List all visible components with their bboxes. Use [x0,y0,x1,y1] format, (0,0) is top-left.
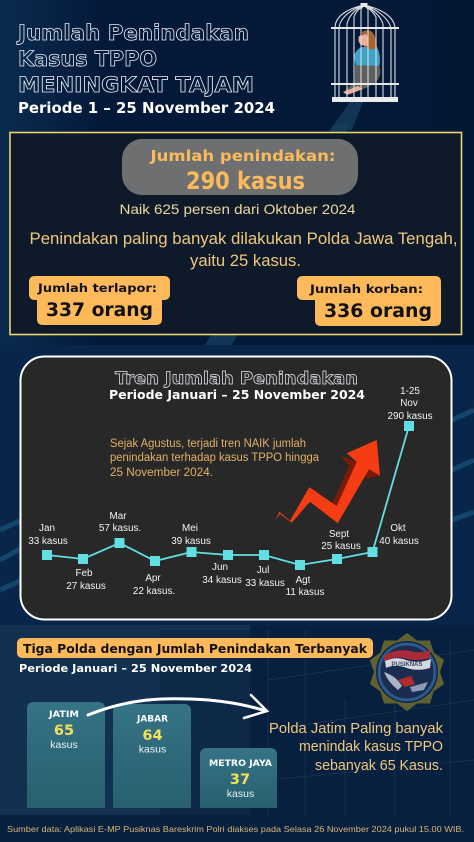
heading: top three regions [17,638,373,658]
trend note: 25 November 2024. [110,467,213,479]
bar: Jatim: JATIM [48,710,79,720]
text: top police region [30,229,458,270]
line chart: Apr [145,573,161,584]
chart subtitle: Periode Januari – 25 November 2024 [109,387,365,402]
line chart: Mar [109,511,127,522]
line chart: Mei [182,523,198,534]
badge: victims: 336 orang [324,301,432,322]
line chart: 33 kasus [245,578,285,589]
bar: Metro Jaya: 37 [230,772,250,788]
callout: top region [269,721,444,774]
line chart: 27 kasus [66,581,106,592]
line chart: 25 kasus [321,541,361,552]
badge: reported persons: 337 orang [46,300,153,321]
bar: Jatim: kasus [50,739,78,751]
subtitle: period: Periode 1 – 25 November 2024 [18,99,275,117]
line chart: Okt [390,523,406,534]
line chart: 22 kasus. [133,586,175,597]
icon: Pusiknas emblem: PUSIKNAS [391,662,423,668]
icon: woman in a cage [330,3,399,130]
line chart: 34 kasus [202,575,242,586]
pill: total enforcement: 290 kasus [186,167,305,195]
panel: trend chart [20,356,452,620]
line chart: Jun [212,562,228,573]
icon: Pusiknas emblem [370,633,444,711]
line chart: 39 kasus [171,536,211,547]
text: monthly increase: Naik 625 persen dari Oktober 2024 [120,201,356,217]
bar chart: top regions [27,702,277,808]
line chart: Jan [39,523,55,534]
pill: total enforcement: Jumlah penindakan: [149,147,336,165]
bar: Jabar: 64 [142,728,163,744]
line chart: 1-25 [400,386,420,397]
text: top police region: yaitu 25 kasus. [190,251,301,270]
subheading: period: Periode Januari – 25 November 2024 [19,662,252,675]
line chart: 57 kasus. [99,523,141,534]
badge: reported persons: Jumlah terlapor: [37,281,157,295]
title: MENINGKAT TAJAM [18,73,254,97]
text: top police region: Penindakan paling banyak dilakukan Polda Jawa Tengah, [30,229,458,248]
trend note: penindakan terhadap kasus TPPO hingga [110,452,320,464]
callout: top region: Polda Jatim Paling banyak [269,721,444,737]
chart title: Tren Jumlah Penindakan [115,369,358,389]
line chart [28,386,433,598]
line chart: Jul [257,565,269,576]
bar: Jabar: kasus [139,744,166,756]
source note: Sumber data: Aplikasi E-MP Pusiknas Bareskrim Polri diakses pada Selasa 26 November 2024 pukul 15.00 WIB. [7,824,464,834]
bar: Jabar: JABAR [136,714,168,724]
pill: total enforcement [122,139,358,195]
line chart: 40 kasus [379,536,419,547]
title: Kasus TPPO [18,47,157,71]
line chart: Feb [75,568,93,579]
trend note [110,438,320,479]
badge: reported persons [29,276,170,325]
bar: Metro Jaya: kasus [227,788,254,800]
title: Jumlah Penindakan [16,21,249,45]
bar: Jabar [113,704,191,808]
callout: top region: sebanyak 65 Kasus. [315,758,443,774]
title [16,21,254,97]
trend note: Sejak Agustus, terjadi tren NAIK jumlah [110,438,306,450]
line chart: 11 kasus [286,587,324,598]
line chart: Sept [329,529,349,540]
line chart: Nov [400,398,418,409]
badge: victims: Jumlah korban: [309,282,423,296]
callout: top region: menindak kasus TPPO [299,739,443,755]
bar: Metro Jaya: METRO JAYA [209,759,272,769]
heading: top three regions: Tiga Polda dengan Jumlah Penindakan Terbanyak [23,642,368,656]
bar: Metro Jaya [200,748,277,808]
panel: case totals [10,132,462,334]
line chart: 33 kasus [28,536,68,547]
line chart: Agt [296,575,311,586]
arrow: to callout [88,695,267,718]
icon: red rising arrow [276,440,380,523]
bar: Jatim: 65 [54,723,74,739]
badge: victims [297,276,441,326]
line chart: 290 kasus [387,411,433,422]
bar: Jatim [27,702,105,808]
